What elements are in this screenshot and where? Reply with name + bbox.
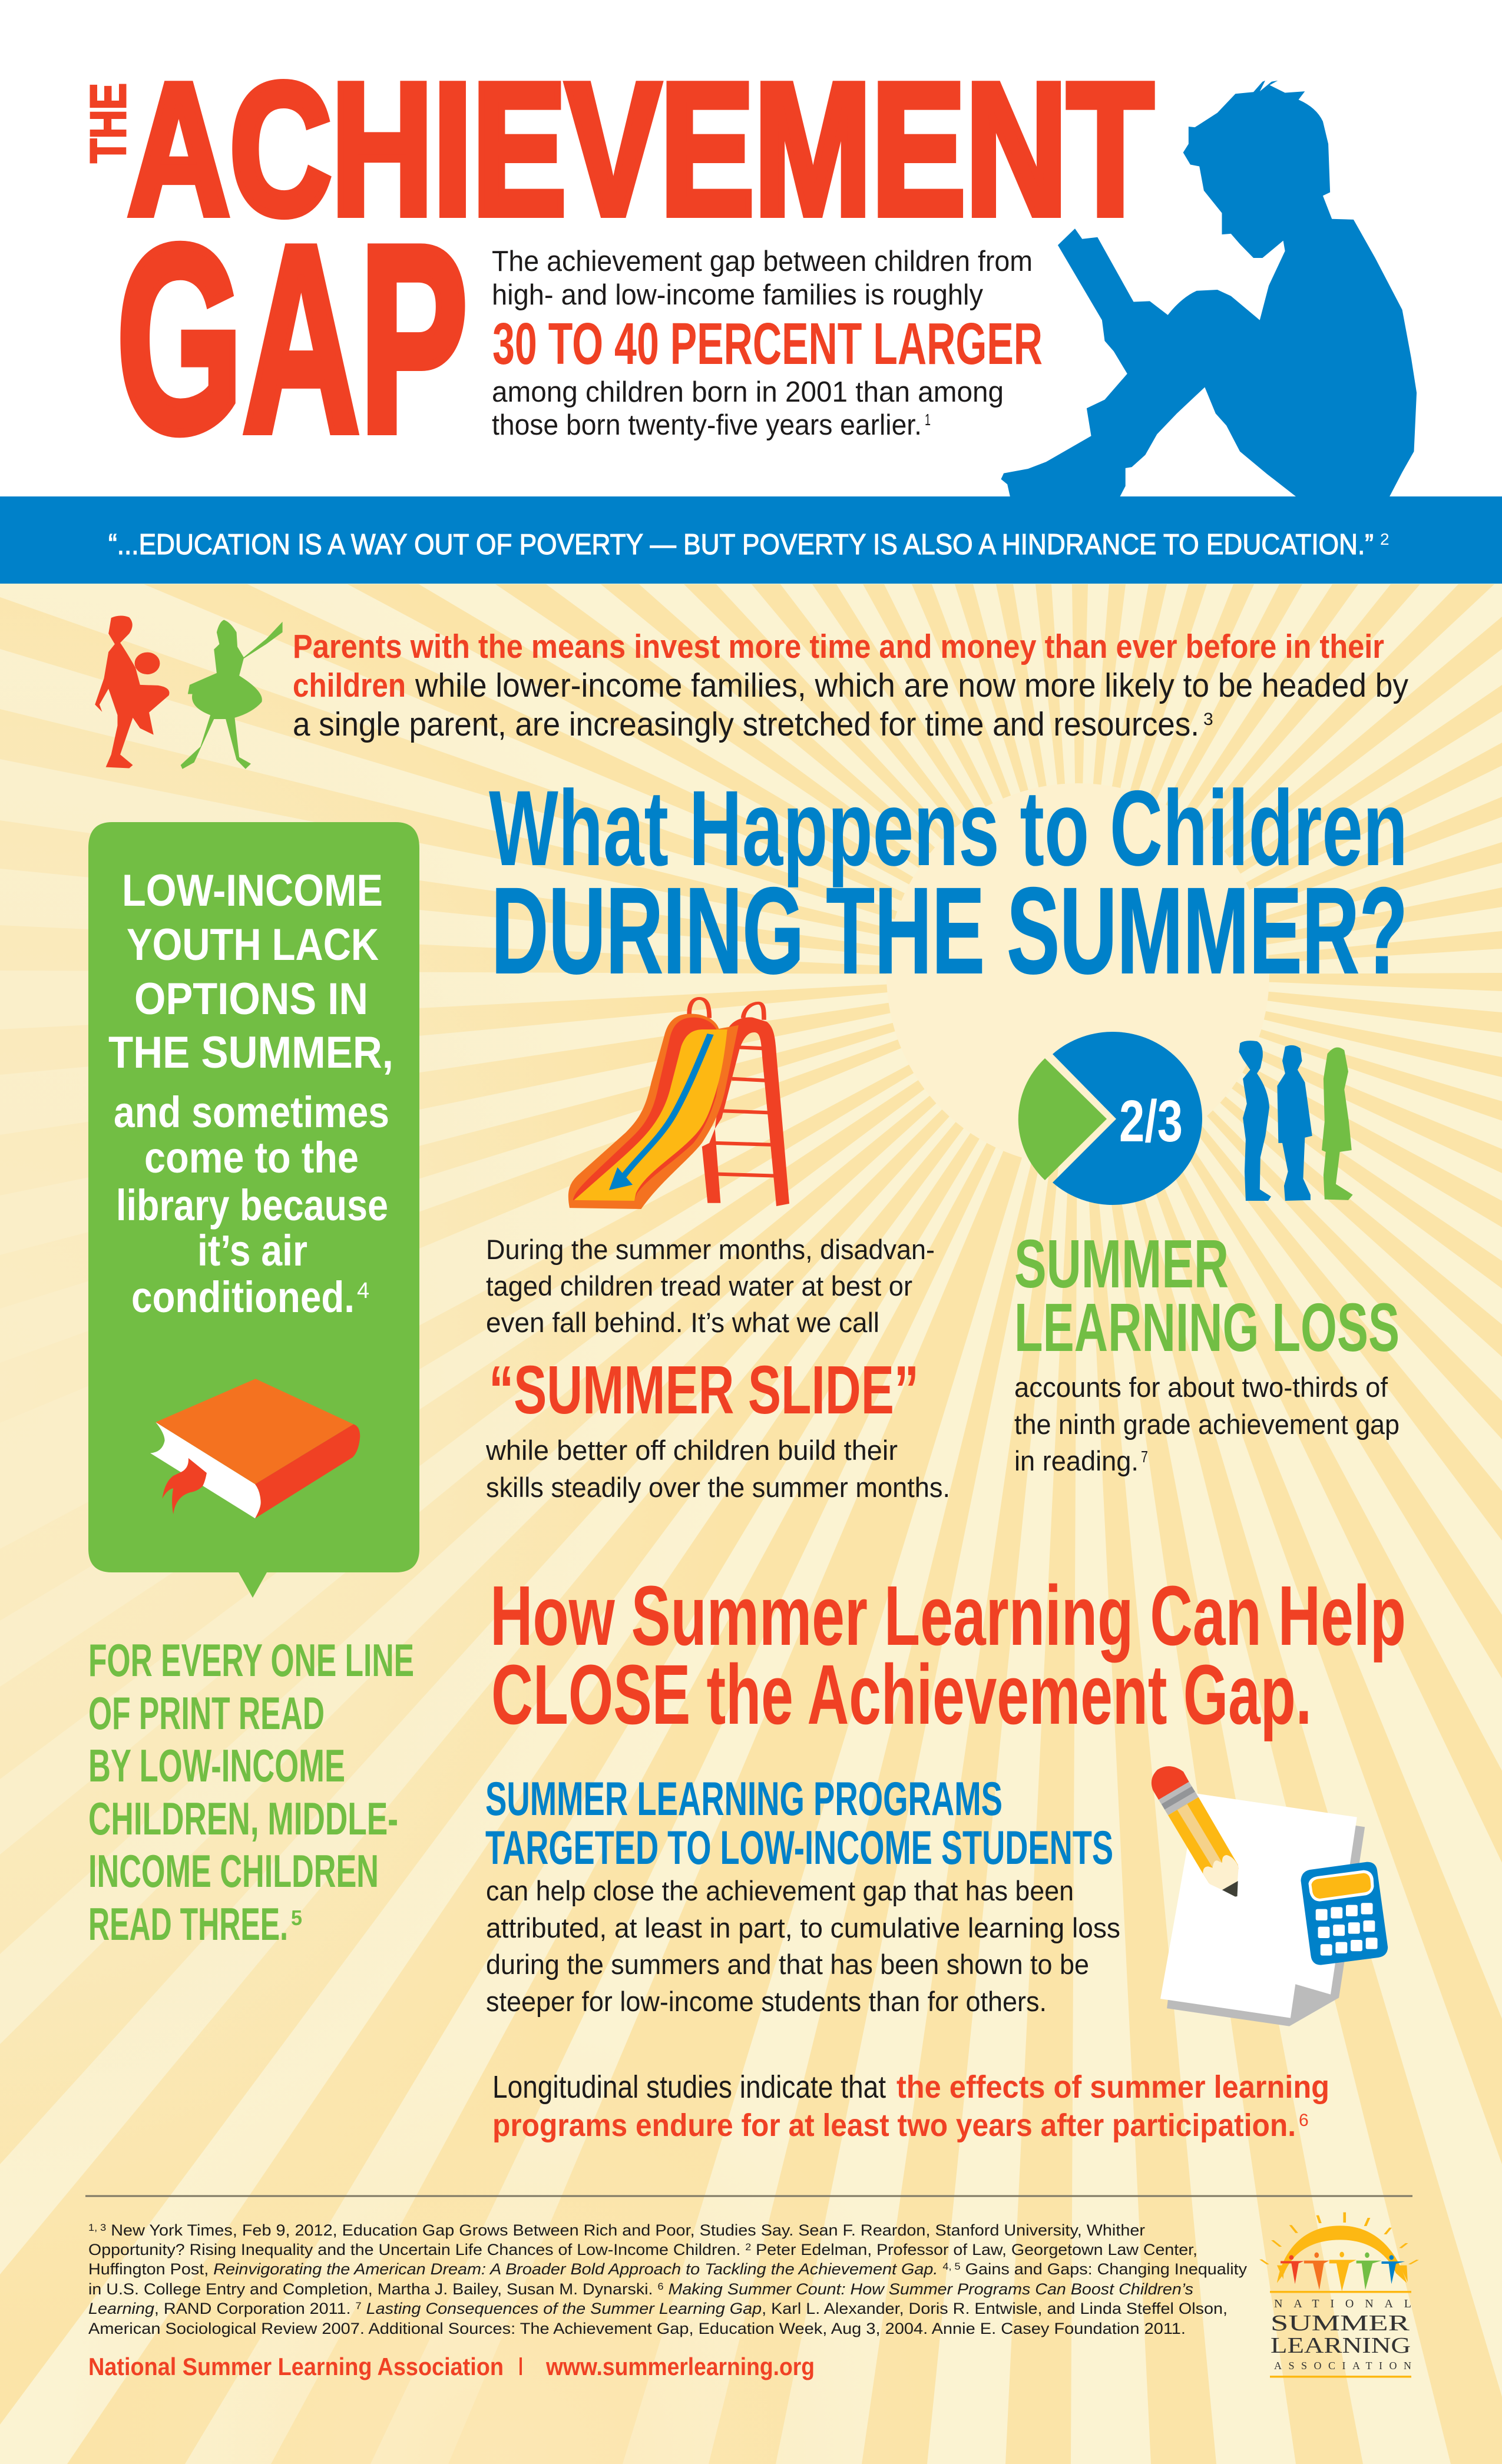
statistic: print read: FOR EVERY ONE LINE bbox=[88, 1634, 414, 1686]
icon: book bbox=[150, 1379, 360, 1518]
longitudinal studies text: programs endure for at least two years after participation. bbox=[492, 2108, 1296, 2143]
statistic: print read: CHILDREN, MIDDLE- bbox=[88, 1793, 398, 1844]
icon: boy with ball bbox=[95, 616, 169, 768]
summer slide text bbox=[485, 1234, 950, 1503]
summer learning loss text bbox=[1014, 1226, 1400, 1476]
intro text block: The achievement gap between children from bbox=[492, 246, 1033, 277]
chart: two-thirds pie bbox=[1018, 1032, 1202, 1205]
icon: three children silhouettes bbox=[1239, 1041, 1353, 1201]
logo: National Summer Learning Association: NATIONAL bbox=[1274, 2297, 1411, 2310]
parents paragraph bbox=[293, 628, 1408, 743]
summer slide text: while better off children build their bbox=[485, 1435, 898, 1466]
statistic: print read bbox=[88, 1634, 414, 1950]
chart: two-thirds pie: 2/3 bbox=[1119, 1088, 1183, 1154]
summer slide text: During the summer months, disadvan- bbox=[486, 1234, 935, 1265]
summer learning programs text: during the summers and that has been shown to be bbox=[486, 1949, 1089, 1980]
footnotes: New York Times, Feb 9, 2012, Education Gap Grows Between Rich and Poor, Studies Say. Sean F. Reardon, Stanford University, Whither bbox=[106, 2221, 1145, 2239]
panel: green speech bubble bbox=[88, 822, 419, 1598]
icon: children playing silhouettes bbox=[95, 616, 283, 769]
subheading: programs: SUMMER LEARNING PROGRAMS bbox=[485, 1773, 1003, 1826]
footnotes: Huffington Post, Reinvigorating the American Dream: A Broader Bold Approach to Tackling the Achievement Gap. bbox=[88, 2260, 893, 2278]
parents paragraph: children bbox=[293, 667, 406, 704]
statistic: print read: READ THREE. bbox=[88, 1898, 288, 1950]
footnotes bbox=[88, 2221, 1248, 2337]
summer learning loss text: in reading. bbox=[1014, 1445, 1139, 1476]
quote banner: “...EDUCATION IS A WAY OUT OF POVERTY — BUT POVERTY IS ALSO A HINDRANCE TO EDUCATION.” bbox=[108, 529, 1374, 561]
footnotes: Making Summer Count: How Summer Programs Can Boost Children’s bbox=[664, 2280, 1193, 2298]
highlight: 30 to 40 percent larger: 30 TO 40 PERCENT LARGER bbox=[492, 311, 1043, 377]
footnotes: Learning , RAND Corporation 2011. bbox=[88, 2300, 339, 2317]
bubble text: OPTIONS IN bbox=[134, 974, 368, 1024]
quote banner bbox=[0, 496, 1502, 584]
heading: summer slide: “SUMMER SLIDE” bbox=[489, 1352, 919, 1428]
bubble text: 4 bbox=[357, 1279, 369, 1303]
footnotes: , Karl L. Alexander, Doris R. Entwisle, and Linda Steffel Olson, bbox=[762, 2300, 1199, 2317]
bubble text: LOW-INCOME bbox=[122, 866, 383, 916]
heading: how summer learning can help bbox=[490, 1568, 1406, 1742]
bubble text: THE SUMMER, bbox=[108, 1028, 393, 1078]
footnotes: in U.S. College Entry and Completion, Martha J. Bailey, Susan M. Dynarski. bbox=[88, 2280, 620, 2298]
summer learning loss text: the ninth grade achievement gap bbox=[1014, 1409, 1400, 1440]
longitudinal studies text: the effects of summer learning bbox=[896, 2069, 1329, 2105]
summer learning programs text: can help close the achievement gap that has been bbox=[486, 1875, 1074, 1906]
logo sun and figures bbox=[1261, 2213, 1418, 2291]
intro text block: those born twenty-five years earlier. bbox=[492, 409, 922, 441]
heading: summer learning loss: SUMMER bbox=[1014, 1226, 1229, 1302]
summer learning programs text: attributed, at least in part, to cumulative learning loss bbox=[486, 1912, 1120, 1943]
bubble text: conditioned. bbox=[131, 1273, 355, 1322]
pencil bbox=[1152, 1766, 1239, 1897]
summer slide text: skills steadily over the summer months. bbox=[486, 1472, 950, 1503]
intro text block: 1 bbox=[925, 410, 931, 429]
parents paragraph: Parents with the means invest more time and money than ever before in their bbox=[293, 628, 1384, 665]
bubble text: come to the bbox=[144, 1133, 359, 1182]
sunburst background bbox=[0, 583, 1502, 2464]
bubble text: and sometimes bbox=[114, 1088, 389, 1137]
bubble text: YOUTH LACK bbox=[127, 920, 379, 970]
footnotes: 1, 3 bbox=[88, 2222, 106, 2233]
footnotes: Lasting Consequences of the Summer Learning Gap bbox=[362, 2300, 762, 2317]
summer learning programs text: TARGETED TO LOW-INCOME STUDENTS bbox=[485, 1821, 1113, 1875]
parents paragraph: while lower-income families, which are now more likely to be headed by bbox=[415, 667, 1408, 704]
longitudinal studies text: Longitudinal studies indicate that bbox=[492, 2069, 886, 2105]
header white background bbox=[0, 0, 1502, 496]
bubble text: it’s air bbox=[197, 1226, 307, 1275]
icon: paper, pencil and calculator bbox=[1152, 1766, 1388, 2026]
footnotes: Gains and Gaps: Changing Inequality bbox=[961, 2260, 1248, 2278]
organisation credit bbox=[88, 2353, 815, 2380]
statistic: print read: BY LOW-INCOME bbox=[88, 1740, 345, 1791]
title word: GAP: GAP bbox=[117, 191, 468, 487]
summer learning programs text: steeper for low-income students than for others. bbox=[486, 1986, 1047, 2017]
icon: slide bbox=[568, 998, 789, 1209]
organisation credit: National Summer Learning Association bbox=[88, 2353, 504, 2380]
statistic: print read: 5 bbox=[291, 1906, 302, 1930]
organisation credit: www.summerlearning.org bbox=[545, 2353, 815, 2380]
bubble text bbox=[108, 866, 393, 1322]
heading: what happens during the summer bbox=[489, 768, 1408, 999]
summer learning programs text bbox=[485, 1773, 1120, 2017]
intro text block: among children born in 2001 than among bbox=[492, 376, 1004, 408]
footnotes: 6 bbox=[657, 2281, 664, 2292]
statistic: print read: INCOME CHILDREN bbox=[88, 1845, 379, 1897]
logo: National Summer Learning Association: ASSOCIATION bbox=[1274, 2360, 1411, 2372]
longitudinal studies text: 6 bbox=[1299, 2111, 1309, 2130]
intro text block bbox=[492, 246, 1043, 441]
footnotes: Peter Edelman, Professor of Law, Georgetown Law Center, bbox=[751, 2241, 1197, 2258]
summer slide text: taged children tread water at best or bbox=[486, 1270, 912, 1301]
quote banner: 2 bbox=[1380, 530, 1389, 548]
icon: ballerina bbox=[181, 620, 283, 769]
footnotes: American Sociological Review 2007. Additional Sources: The Achievement Gap, Education Week, Aug 3, 2004. Annie E. Casey Foundation 2011. bbox=[88, 2320, 1186, 2337]
logo: National Summer Learning Association: LEARNING bbox=[1271, 2333, 1411, 2358]
statistic: print read: OF PRINT READ bbox=[88, 1687, 325, 1739]
logo: National Summer Learning Association bbox=[1261, 2213, 1418, 2378]
icon: boy reading silhouette bbox=[1001, 81, 1417, 496]
intro text block: high- and low-income families is roughly bbox=[492, 279, 983, 311]
longitudinal studies text bbox=[492, 2069, 1329, 2143]
logo: National Summer Learning Association: SUMMER bbox=[1271, 2311, 1410, 2336]
footnotes: 4, 5 bbox=[942, 2261, 961, 2272]
bubble text: library because bbox=[116, 1181, 388, 1230]
footer rule bbox=[85, 2195, 1412, 2197]
parents paragraph: 3 bbox=[1203, 710, 1213, 729]
footnotes: Opportunity? Rising Inequality and the Uncertain Life Chances of Low-Income Children. bbox=[88, 2241, 704, 2258]
calculator bbox=[1301, 1862, 1388, 1965]
summer slide text: even fall behind. It’s what we call bbox=[486, 1307, 879, 1338]
summer learning loss text: 7 bbox=[1141, 1448, 1148, 1466]
title word: THE: THE bbox=[81, 83, 137, 163]
parents paragraph: a single parent, are increasingly stretched for time and resources. bbox=[293, 706, 1199, 743]
summer learning loss text: accounts for about two-thirds of bbox=[1014, 1372, 1388, 1403]
title word: ACHIEVEMENT: ACHIEVEMENT bbox=[128, 45, 1153, 254]
footnotes: 2 bbox=[745, 2241, 751, 2253]
title bbox=[81, 45, 1153, 487]
footnotes: 7 bbox=[356, 2300, 362, 2311]
